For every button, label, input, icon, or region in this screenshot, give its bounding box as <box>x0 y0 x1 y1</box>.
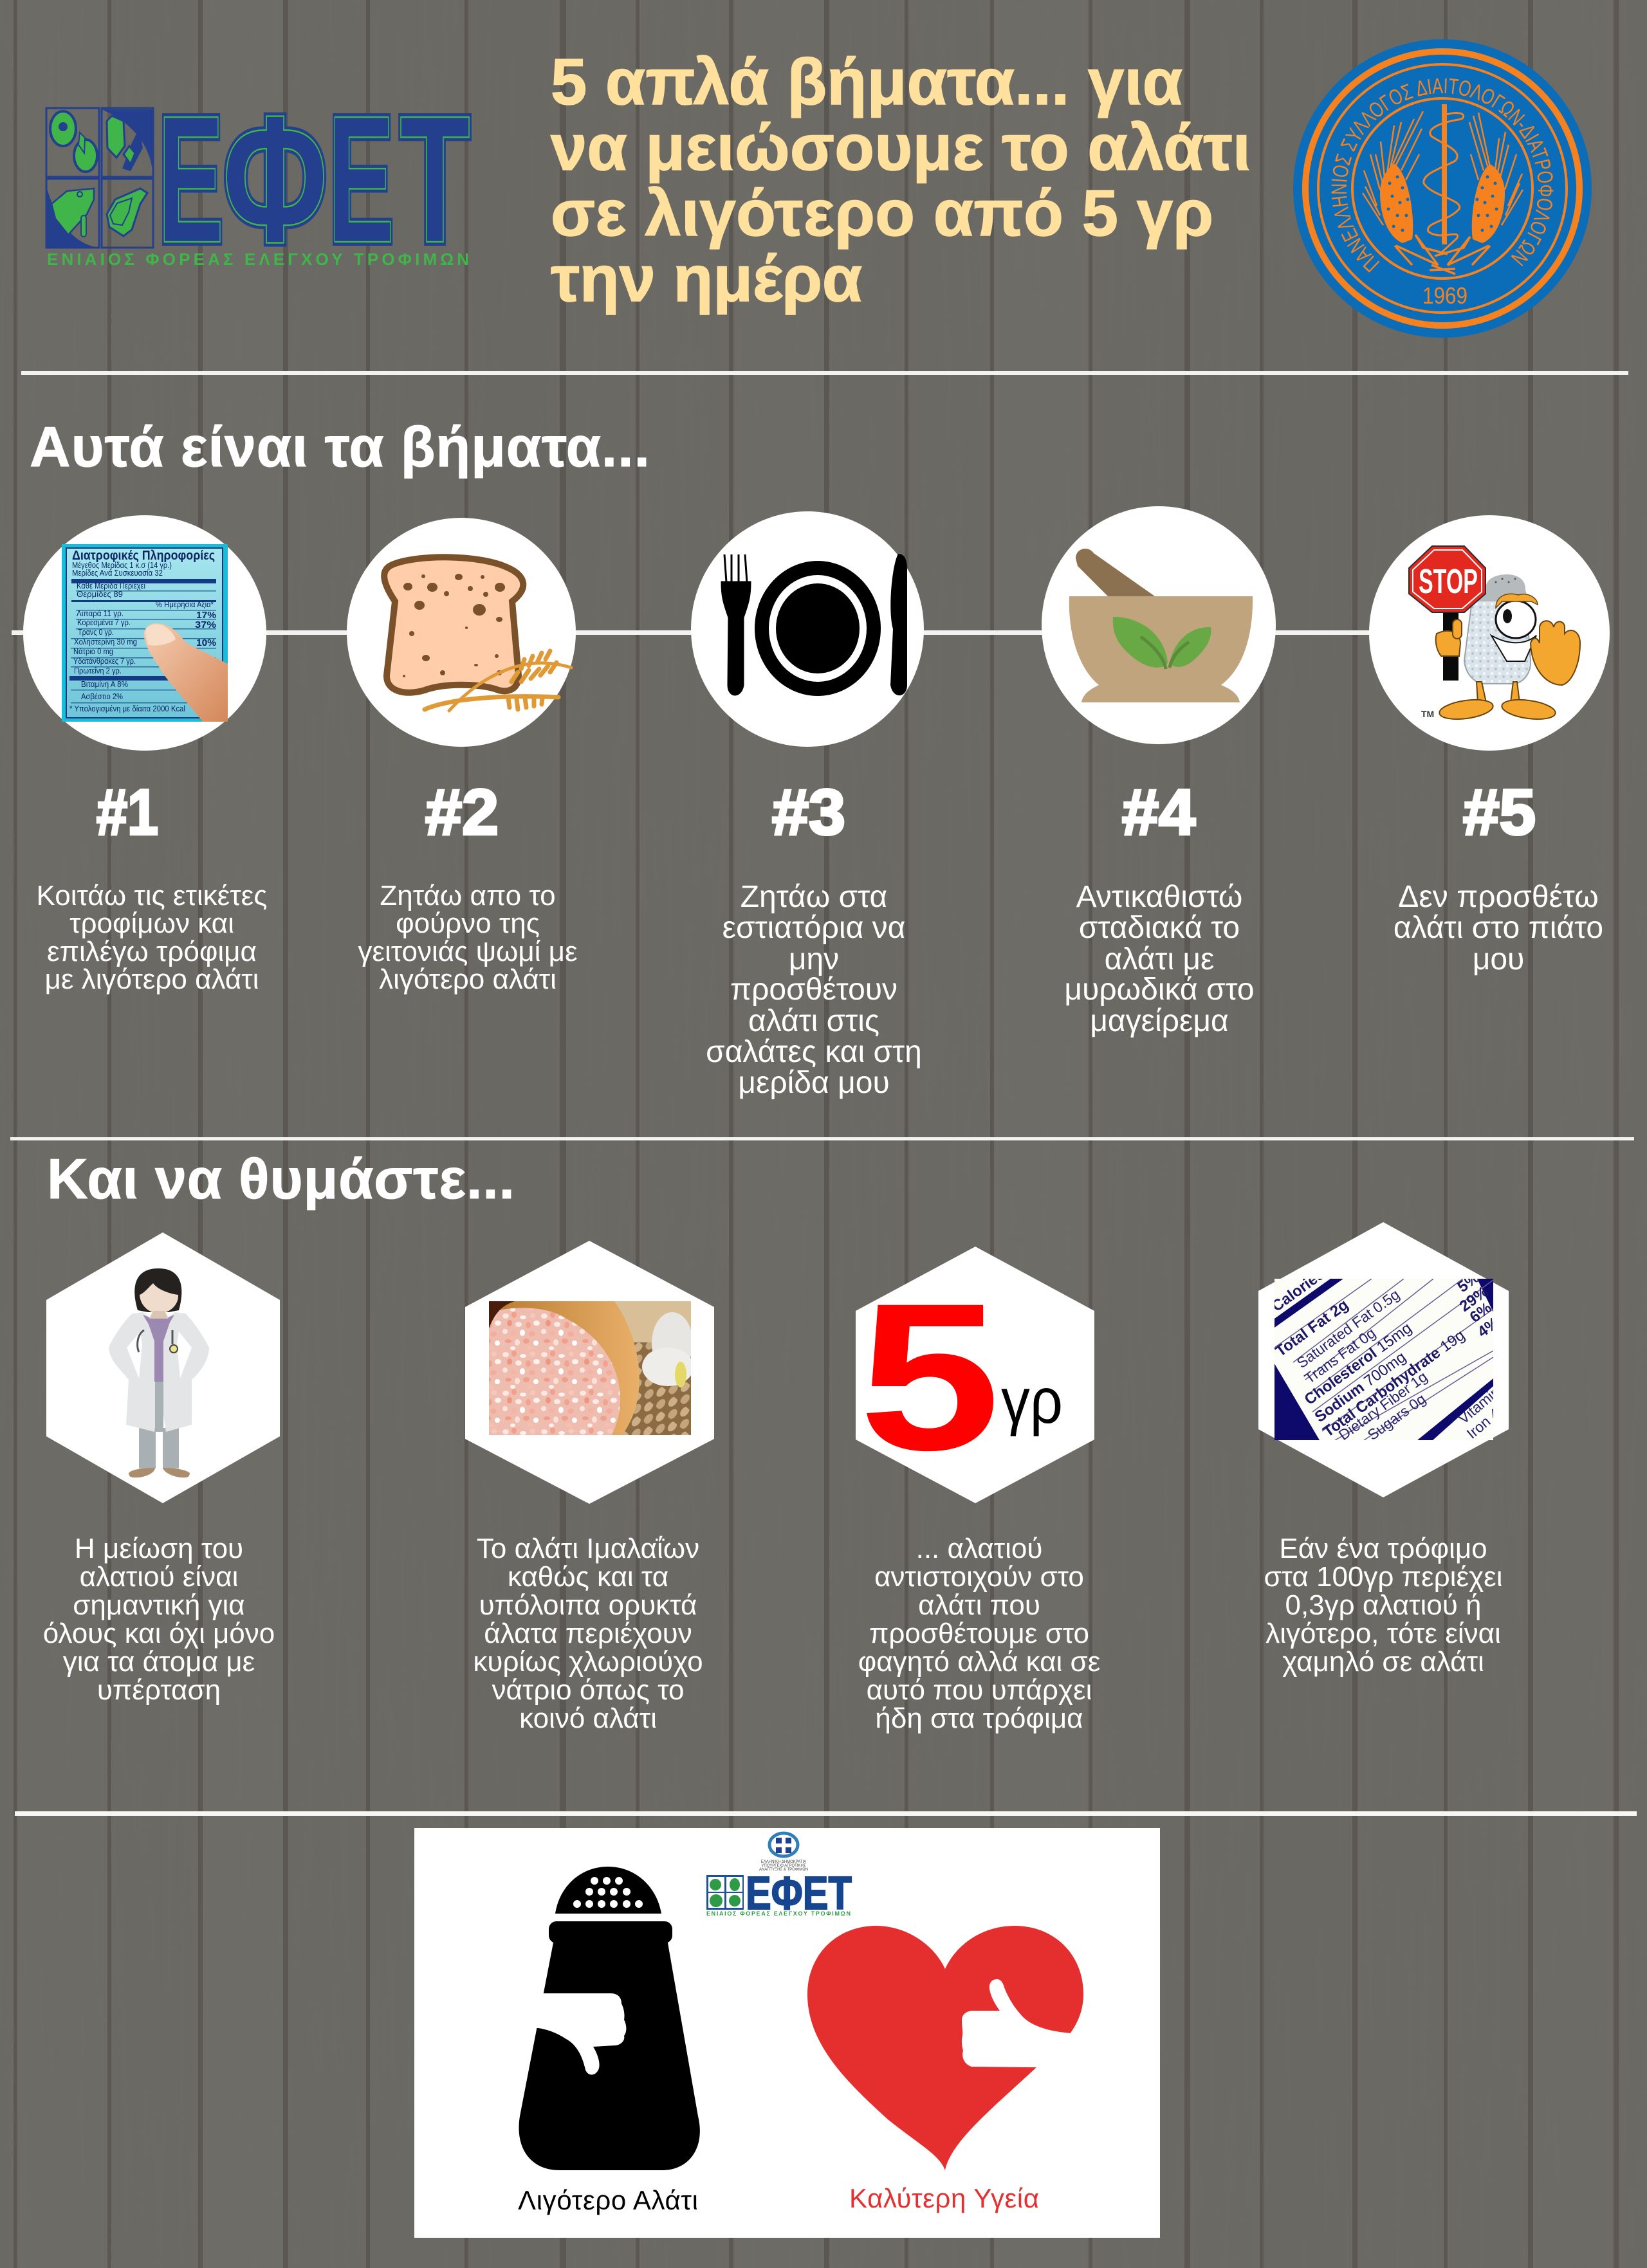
nutrition label photo: 10% <box>196 637 216 648</box>
herb leaves <box>1113 617 1211 669</box>
wordmark: Φ <box>223 78 327 280</box>
step 3 text: Ζητάω στα <box>741 880 887 914</box>
step 3 text: μην <box>789 942 839 976</box>
remember text 1: υπέρταση <box>97 1674 221 1706</box>
nutrition facts photo: Vitamin <box>1455 1383 1504 1427</box>
nutrition label photo: Μέγεθος Μερίδας 1 κ.σ (14 γρ.) <box>72 560 172 570</box>
title: σε λιγότερο από 5 γρ <box>551 178 1213 250</box>
remember text 1: για τα άτομα με <box>63 1646 255 1678</box>
wordmark: Ε <box>328 78 394 280</box>
small EFET logo: ΥΠΟΥΡΓΕΙΟ ΑΓΡΟΤΙΚΗΣ <box>761 1864 806 1868</box>
step 5 circle with salt shaker stop mascot: TM <box>1421 709 1434 719</box>
nutrition label photo: Νάτριο 0 mg <box>73 646 113 656</box>
nutrition label photo: % Ημερήσια Αξία* <box>156 599 214 609</box>
wheat ears <box>1363 111 1523 274</box>
nutrition label photo: Βιταμίνη Α 8% <box>81 679 128 689</box>
nutrition facts photo: Dietary Fiber 1g <box>1336 1368 1430 1443</box>
greek emblem <box>769 1833 798 1856</box>
caption: better health: Καλύτερη Υγεία <box>849 2183 1039 2213</box>
wheat sprig <box>425 651 571 711</box>
nutrition label photo: * Υπολογισμένη με δίαιτα 2000 Kcal <box>69 704 185 713</box>
step numbers: #3 <box>772 776 845 848</box>
step numbers: #4 <box>1122 776 1195 848</box>
knife <box>890 554 907 695</box>
remember text 1: Η μείωση του <box>75 1533 243 1564</box>
nutrition facts photo: Total Fat 2g <box>1273 1296 1352 1360</box>
mortar <box>1069 596 1253 702</box>
nutrition label photo: Κορεσμένα 7 γρ. <box>77 617 131 627</box>
remember text 3: ... αλατιού <box>916 1533 1042 1564</box>
pole <box>1443 611 1458 681</box>
hands and feet <box>1436 619 1580 722</box>
step numbers: #5 <box>1463 776 1536 848</box>
nutrition facts photo: Total Carbohydrate 19g <box>1320 1326 1468 1441</box>
bread slice <box>384 557 523 693</box>
nutrition facts photo: Iron 4% <box>1464 1396 1513 1442</box>
remember text 4: λιγότερο, τότε είναι <box>1265 1618 1501 1649</box>
nutrition facts photo: Sugars 0g <box>1365 1390 1429 1443</box>
salt bowl photo <box>489 1301 695 1439</box>
step 1 circle with nutrition label <box>23 515 266 751</box>
step 1 text: Κοιτάω τις ετικέτες <box>36 880 268 911</box>
step 4 text: σταδιακά το <box>1079 911 1240 945</box>
wordmark: Ε <box>328 78 394 280</box>
finger <box>144 623 228 722</box>
step 1 text: τροφίμων και <box>69 908 234 939</box>
step 2 text: γειτονιάς ψωμί με <box>358 936 578 967</box>
panel: less salt better health <box>414 1828 1160 2238</box>
wordmark: Τ <box>400 78 470 280</box>
nutrition label photo <box>62 544 228 722</box>
title <box>551 46 1251 315</box>
step 2 text: φούρνο της <box>396 908 540 939</box>
step 3 text: σαλάτες και στη <box>706 1035 922 1069</box>
step 4 text: αλάτι με <box>1105 942 1214 976</box>
nutrition label photo: Ασβέστιο 2% <box>81 691 123 701</box>
remember text 3: αυτό που υπάρχει <box>867 1674 1092 1706</box>
step 4 circle with mortar and pestle <box>1042 506 1276 744</box>
remember text 3: προσθέτουμε στο <box>869 1618 1089 1649</box>
hexagon 1 with doctor <box>46 1232 280 1503</box>
step numbers: #1 <box>97 776 158 848</box>
divider <box>10 1137 1634 1140</box>
wordmark: Ε <box>158 78 224 280</box>
nutrition label photo: 17% <box>196 610 216 621</box>
small EFET logo: ΕΦΕΤ <box>746 1868 852 1919</box>
nutrition facts photo: Cholesterol 15mg <box>1302 1319 1415 1409</box>
step 5 text: αλάτι στο πιάτο <box>1394 911 1603 945</box>
nutrition label photo: Μερίδες Ανά Συσκευασία 32 <box>72 568 163 578</box>
hexagon 4 with nutrition facts photo <box>1258 1222 1513 1497</box>
icon grid <box>46 108 153 248</box>
remember text 2: νάτριο όπως το <box>492 1674 684 1706</box>
step 4 text: μαγείρεμα <box>1090 1004 1229 1038</box>
plate <box>755 561 881 696</box>
step 3 text: μερίδα μου <box>738 1066 890 1100</box>
nutrition facts photo <box>1274 1279 1493 1440</box>
wordmark <box>158 78 470 280</box>
wordmark: Ε <box>158 78 224 280</box>
big 5: 5 <box>859 1260 1000 1494</box>
wordmark: Τ <box>400 78 470 280</box>
remember text 3: αντιστοιχούν στο <box>874 1561 1084 1593</box>
nutrition label photo: Λιπαρά 11 γρ. <box>77 608 124 618</box>
nutrition label photo: Τρανς 0 γρ. <box>78 627 114 637</box>
small EFET logo: ΕΛΛΗΝΙΚΗ ΔΗΜΟΚΡΑΤΙΑ <box>761 1860 806 1864</box>
nutrition label photo: Κάθε Μερίδα Περιέχει <box>77 581 145 590</box>
divider <box>15 1811 1637 1816</box>
remember text 3: φαγητό αλλά και σε <box>858 1646 1100 1678</box>
step 5 circle with salt shaker stop mascot <box>1369 515 1610 751</box>
title: να μειώσουμε το αλάτι <box>551 112 1251 184</box>
logo tagline: ΕΝΙΑΙΟΣ ΦΟΡΕΑΣ ΕΛΕΓΧΟΥ ΤΡΟΦΙΜΩΝ <box>47 250 469 269</box>
nutrition label photo: Θερμίδες 89 <box>77 589 123 599</box>
remember text 2: Το αλάτι Ιμαλαΐων <box>477 1533 699 1564</box>
title: 5 απλά βήματα... για <box>551 46 1182 118</box>
caption: less salt: Λιγότερο Αλάτι <box>518 2185 698 2215</box>
nutrition label photo: 37% <box>195 619 216 630</box>
remember text 3: αλάτι που <box>918 1589 1040 1621</box>
step numbers <box>97 776 1536 848</box>
staff and serpent <box>1424 104 1464 254</box>
remember text 3: ήδη στα τρόφιμα <box>875 1703 1083 1734</box>
remember text 2: κοινό αλάτι <box>519 1703 657 1734</box>
step numbers: #2 <box>425 776 499 848</box>
nutrition label photo: Πρωτεΐνη 2 γρ. <box>74 666 122 675</box>
small EFET logo <box>706 1833 852 1919</box>
remember text 2: άλατα περιέχουν <box>484 1618 692 1649</box>
seal: dietitians association: 1969 <box>1422 282 1468 309</box>
seal: dietitians association: ΠΑΝΕΛΛΗΝΙΟΣ ΣΥΛΛΟΓΟΣ ΔΙΑΙΤΟΛΟΓΩΝ-ΔΙΑΤΡΟΦΟΛΟΓΩΝ <box>1332 78 1554 273</box>
step 5 text: Δεν προσθέτω <box>1398 880 1599 914</box>
mascot body <box>1464 600 1531 684</box>
step 4 text: μυρωδικά στο <box>1064 973 1255 1007</box>
remember text 4: στα 100γρ περιέχει <box>1264 1561 1503 1593</box>
logo: EFET <box>46 78 470 280</box>
nutrition facts photo: Calories 110 <box>1269 1248 1352 1315</box>
thumbs down <box>515 1993 626 2075</box>
divider <box>21 371 1628 375</box>
heart <box>807 1926 1083 2170</box>
remember text 2: καθώς και τα <box>508 1561 668 1593</box>
step 2 text: λιγότερο αλάτι <box>379 964 557 995</box>
nutrition label photo: Υδατάνθρακες 7 γρ. <box>73 656 136 666</box>
step 2 circle with bread <box>347 518 576 747</box>
unit: γρ <box>1001 1365 1063 1437</box>
small EFET logo: ΑΝΑΠΤΥΞΗΣ & ΤΡΟΦΙΜΩΝ <box>759 1868 808 1872</box>
thumbs up <box>962 1979 1094 2078</box>
remember text 1: σημαντική για <box>73 1589 245 1621</box>
step 2 text: Ζητάω απο το <box>380 880 556 911</box>
connector line <box>12 630 1414 635</box>
eyes <box>1496 601 1536 638</box>
salt shaker <box>515 1867 700 2170</box>
pestle <box>1076 549 1155 596</box>
remember text 2: κυρίως χλωριούχο <box>473 1646 703 1678</box>
step 5 circle with salt shaker stop mascot: STOP <box>1419 562 1478 601</box>
nutrition facts photo: Saturated Fat 0.5g <box>1294 1286 1403 1371</box>
hexagon 2 with himalayan salt photo <box>465 1241 714 1504</box>
nutrition facts photo: 29% <box>1457 1283 1491 1315</box>
nutrition label photo: Χοληστερίνη 30 mg <box>74 637 137 646</box>
step 3 text: αλάτι στις <box>748 1004 879 1038</box>
step 1 text: με λιγότερο αλάτι <box>45 964 259 995</box>
remember text 4: Εάν ένα τρόφιμο <box>1279 1533 1487 1564</box>
fork <box>722 554 750 695</box>
title: την ημέρα <box>551 243 862 315</box>
nutrition facts photo: Sodium 700mg <box>1312 1348 1409 1426</box>
nutrition facts photo: 6% <box>1467 1299 1495 1326</box>
small EFET logo: ΕΝΙΑΙΟΣ ΦΟΡΕΑΣ ΕΛΕΓΧΟΥ ΤΡΟΦΙΜΩΝ <box>706 1910 851 1917</box>
remember text 4: 0,3γρ αλατιού ή <box>1285 1589 1482 1621</box>
remember text 1: αλατιού είναι <box>80 1561 238 1593</box>
doctor figure <box>109 1268 209 1477</box>
hexagon 3 with 5 grams <box>856 1247 1094 1503</box>
nutrition facts photo: Trans Fat 0g <box>1302 1324 1379 1387</box>
nutrition facts photo: 5% <box>1455 1269 1483 1296</box>
step 5 text: μου <box>1473 942 1524 976</box>
step 3 text: εστιατόρια να <box>722 911 905 945</box>
remember text 2: υπόλοιπα ορυκτά <box>479 1589 697 1621</box>
nutrition label photo: Διατροφικές Πληροφορίες <box>72 549 215 563</box>
step 3 circle with plate <box>691 511 924 747</box>
step 1 text: επιλέγω τρόφιμα <box>47 936 257 967</box>
stop sign <box>1409 546 1486 612</box>
nutrition facts photo: 4% <box>1475 1314 1503 1341</box>
heading: remember: Και να θυμάστε... <box>47 1147 515 1211</box>
remember text 4: χαμηλό σε αλάτι <box>1282 1646 1484 1678</box>
wordmark: Φ <box>223 78 327 280</box>
remember text 1: όλους και όχι μόνο <box>43 1618 275 1649</box>
step 4 text: Αντικαθιστώ <box>1076 880 1242 914</box>
step 3 text: προσθέτουν <box>730 973 897 1007</box>
heading: steps: Αυτά είναι τα βήματα... <box>30 415 650 479</box>
seal: dietitians association <box>1293 39 1592 338</box>
